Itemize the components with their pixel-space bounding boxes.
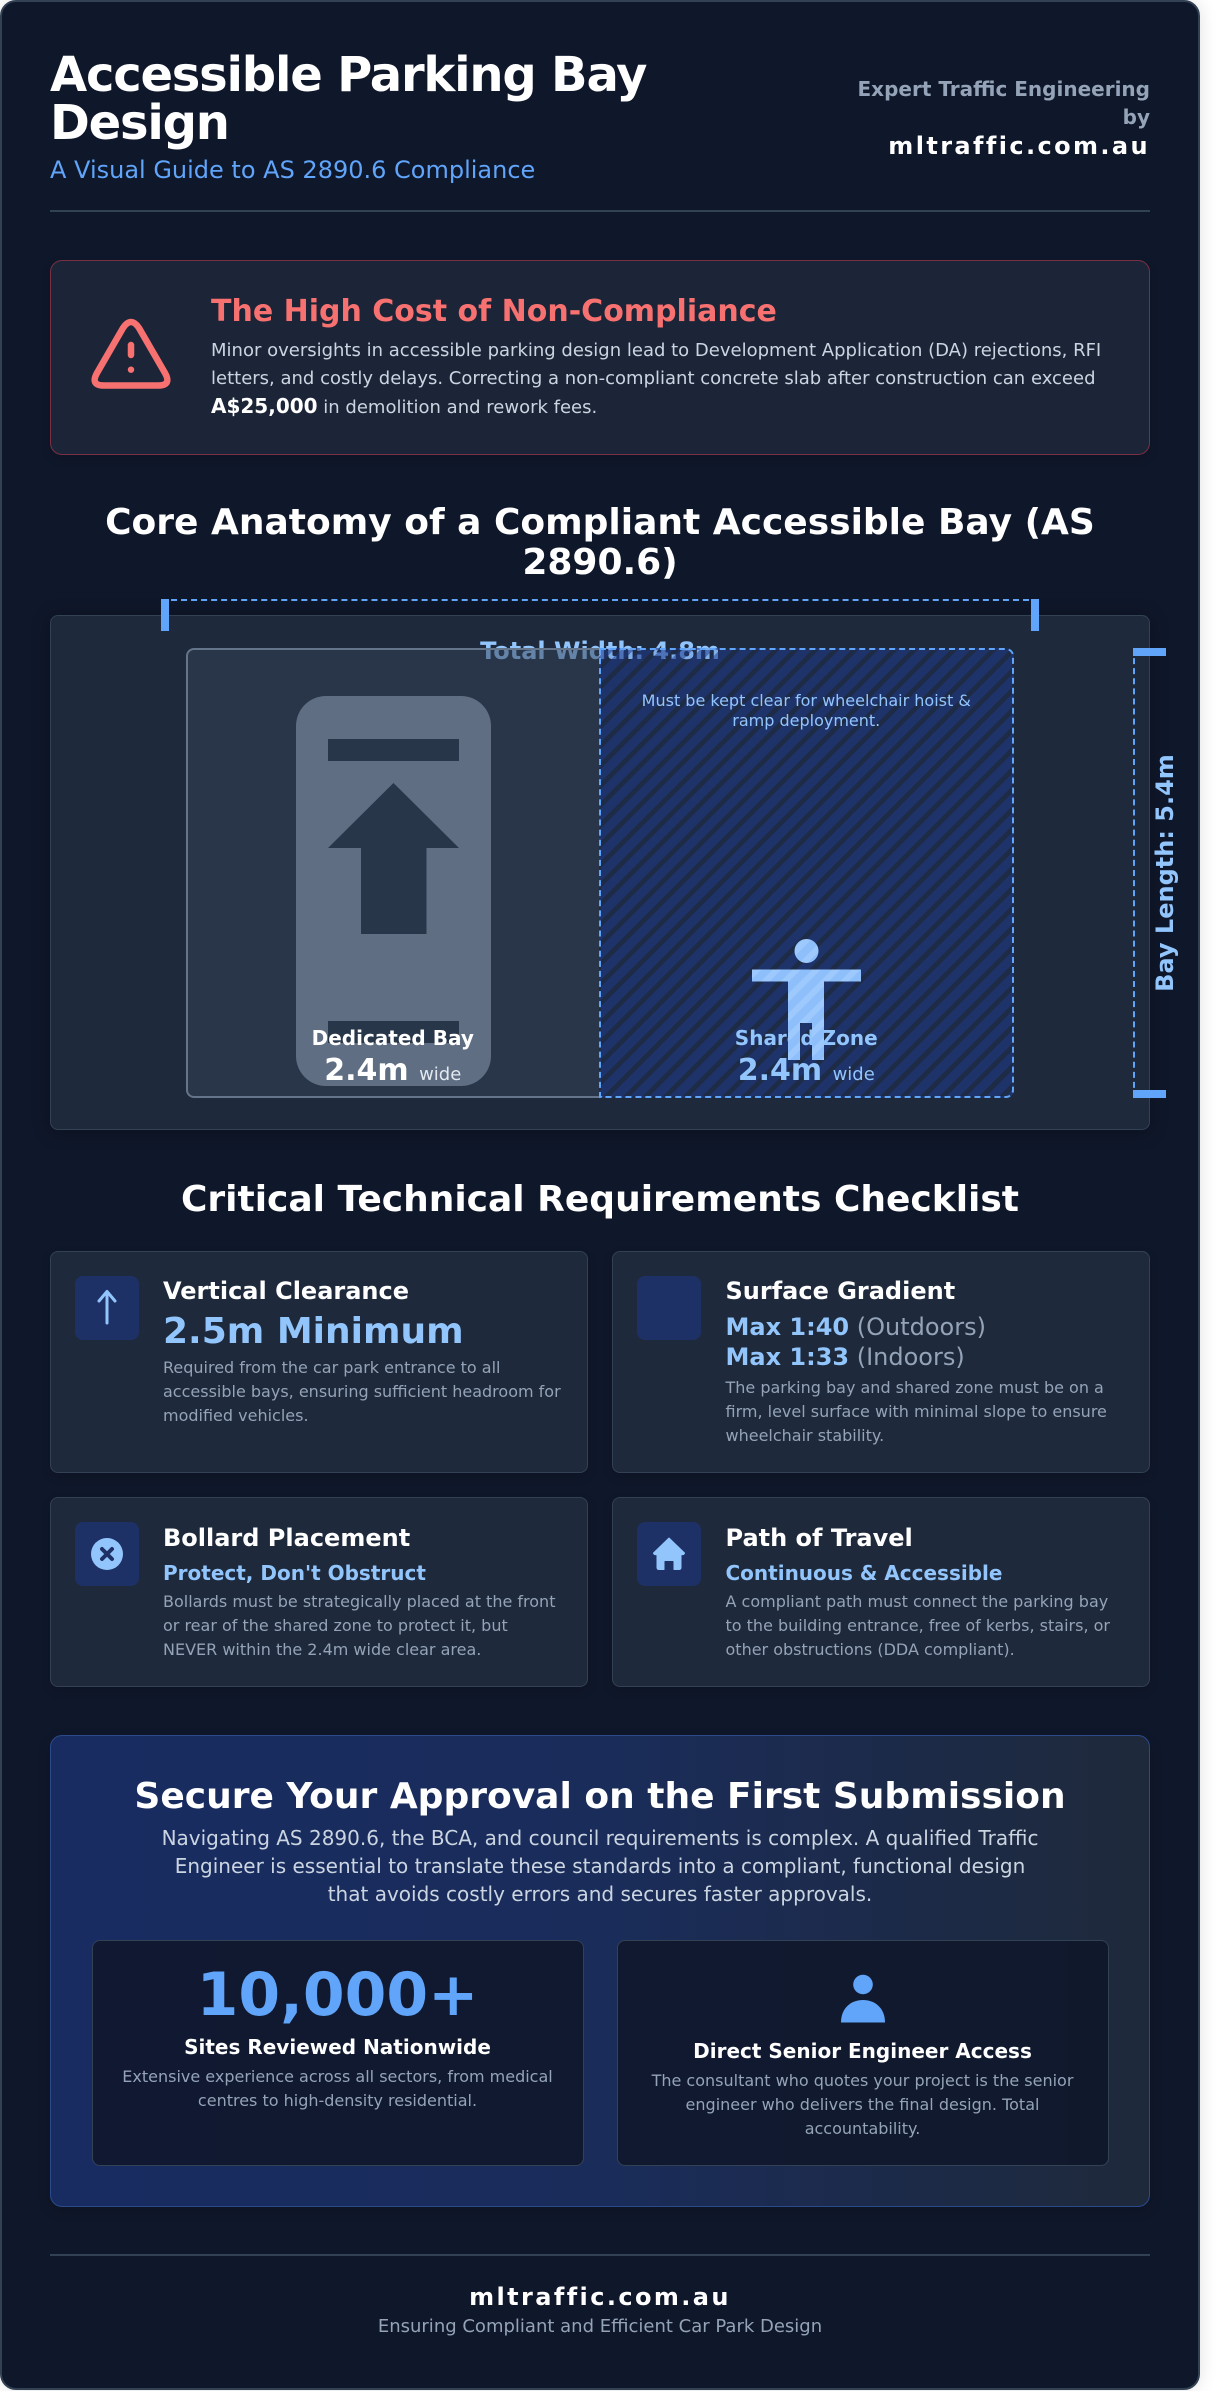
key values: Max 1:33 (Indoors): [726, 1343, 965, 1371]
description: firm, level surface with minimal slope to ensure: [726, 1402, 1107, 1420]
card: vertical clearance: [50, 1251, 588, 1473]
cta text: Engineer is essential to translate these standards into a compliant, functional design: [175, 1854, 1025, 1878]
access text: The consultant who quotes your project is the senior: [652, 2071, 1073, 2090]
description: Required from the car park entrance to all: [163, 1358, 500, 1377]
shared zone note: Must be kept clear for wheelchair hoist &: [642, 691, 971, 710]
icon: house: [637, 1522, 701, 1586]
cta text: [162, 1826, 1038, 1906]
card title: Surface Gradient: [726, 1277, 955, 1305]
footer tagline: Ensuring Compliant and Efficient Car Park Design: [378, 2316, 822, 2337]
alert text: letters, and costly delays. Correcting a non-compliant concrete slab after construction can exceed: [211, 368, 1096, 389]
brand block: mltraffic.com.au: [888, 132, 1150, 160]
dimension label: bay length: Bay Length: 5.4m: [1151, 754, 1179, 992]
brand block: Expert Traffic Engineering: [858, 77, 1150, 101]
description: accessible bays, ensuring sufficient headroom for: [163, 1382, 561, 1401]
description: Bollards must be strategically placed at the front: [163, 1592, 555, 1610]
access text: [652, 2071, 1074, 2138]
icon: car top view: [296, 696, 491, 1086]
dimension label: total width: Total Width: 4.8m: [480, 637, 720, 665]
access title: Direct Senior Engineer Access: [693, 2039, 1032, 2063]
stat title: Sites Reviewed Nationwide: [184, 2035, 491, 2059]
cta text: that avoids costly errors and secures faster approvals.: [328, 1882, 872, 1906]
icon: circled cross: [75, 1522, 139, 1586]
alert text: Minor oversights in accessible parking design lead to Development Application (DA) rejections, RFI: [211, 340, 1101, 360]
subtitle: A Visual Guide to AS 2890.6 Compliance: [50, 156, 535, 184]
access text: accountability.: [805, 2119, 920, 2138]
panel: bay anatomy diagram: [50, 615, 1150, 1130]
heading: core anatomy: 2890.6): [522, 542, 678, 583]
panel: high cost alert: [50, 260, 1150, 455]
description: [726, 1592, 1110, 1658]
label: dedicated bay: Dedicated Bay: [312, 1026, 474, 1050]
dedicated bay: [186, 648, 599, 1098]
description: NEVER within the 2.4m wide clear area.: [163, 1640, 481, 1658]
width: shared zone: 2.4m wide: [738, 1052, 875, 1088]
description: The parking bay and shared zone must be on a: [726, 1378, 1104, 1396]
icon: person: [841, 1974, 885, 2022]
description: [163, 1592, 556, 1658]
key value: Continuous & Accessible: [726, 1560, 1002, 1584]
stat card: senior engineer: [616, 1940, 1109, 2166]
heading: checklist: Critical Technical Requirements Checklist: [181, 1178, 1019, 1220]
brand block: by: [1123, 105, 1150, 129]
stat text: [122, 2066, 553, 2110]
key values: Max 1:40 (Outdoors): [726, 1313, 986, 1341]
icon box: empty: [637, 1276, 701, 1340]
card: bollard placement: [50, 1496, 588, 1687]
cta text: Navigating AS 2890.6, the BCA, and council requirements is complex. A qualified Traffic: [162, 1826, 1038, 1850]
stat card: sites reviewed: [92, 1940, 584, 2166]
heading: core anatomy: Core Anatomy of a Compliant Accessible Bay (AS: [105, 502, 1095, 543]
brand block: [858, 77, 1150, 160]
heading: core anatomy: [105, 502, 1095, 583]
key values: [726, 1313, 986, 1371]
title: [50, 47, 646, 151]
card title: Vertical Clearance: [163, 1277, 409, 1305]
shared zone note: [642, 691, 971, 730]
header divider: [50, 210, 1150, 212]
card title: Path of Travel: [726, 1524, 913, 1552]
description: wheelchair stability.: [726, 1426, 884, 1444]
footer divider: [50, 2254, 1150, 2256]
description: [163, 1358, 561, 1425]
icon: person: [752, 939, 861, 1060]
description: other obstructions (DDA compliant).: [726, 1640, 1015, 1658]
card: path of travel: [612, 1496, 1150, 1687]
card title: Bollard Placement: [163, 1524, 410, 1552]
shared zone note: ramp deployment.: [732, 711, 880, 730]
description: or rear of the shared zone to protect it, but: [163, 1616, 508, 1634]
icon: warning triangle: [91, 318, 171, 389]
label: shared zone: Shared Zone: [735, 1026, 878, 1050]
cta heading: Secure Your Approval on the First Submission: [134, 1776, 1066, 1816]
stat text: centres to high-density residential.: [198, 2090, 477, 2110]
stat text: Extensive experience across all sectors, from medical: [122, 2066, 553, 2086]
header: [50, 47, 1150, 212]
footer brand: mltraffic.com.au: [469, 2283, 731, 2311]
description: to the building entrance, free of kerbs, stairs, or: [726, 1616, 1110, 1634]
footer: [50, 2254, 1150, 2337]
card: surface gradient: [612, 1251, 1150, 1473]
dimension: bay length bracket: [1132, 648, 1166, 1098]
shared zone: [599, 648, 1014, 1098]
dimension: total width bracket: [161, 599, 1039, 631]
title: Accessible Parking Bay: [50, 47, 646, 103]
icon: up arrow: [75, 1276, 139, 1340]
description: A compliant path must connect the parking bay: [726, 1592, 1108, 1610]
big number: 10,000+: [197, 1960, 478, 2030]
panel: call to action: [50, 1734, 1150, 2206]
access text: engineer who delivers the final design. Total: [686, 2095, 1039, 2114]
title: Design: [50, 95, 229, 151]
alert text: [211, 340, 1101, 418]
key value: Protect, Don't Obstruct: [163, 1560, 426, 1584]
alert text: A$25,000 in demolition and rework fees.: [211, 394, 597, 418]
alert heading: The High Cost of Non-Compliance: [211, 294, 777, 328]
width: dedicated bay: 2.4m wide: [324, 1052, 461, 1088]
key value: 2.5m Minimum: [163, 1311, 464, 1352]
description: [725, 1378, 1107, 1444]
description: modified vehicles.: [163, 1406, 309, 1425]
